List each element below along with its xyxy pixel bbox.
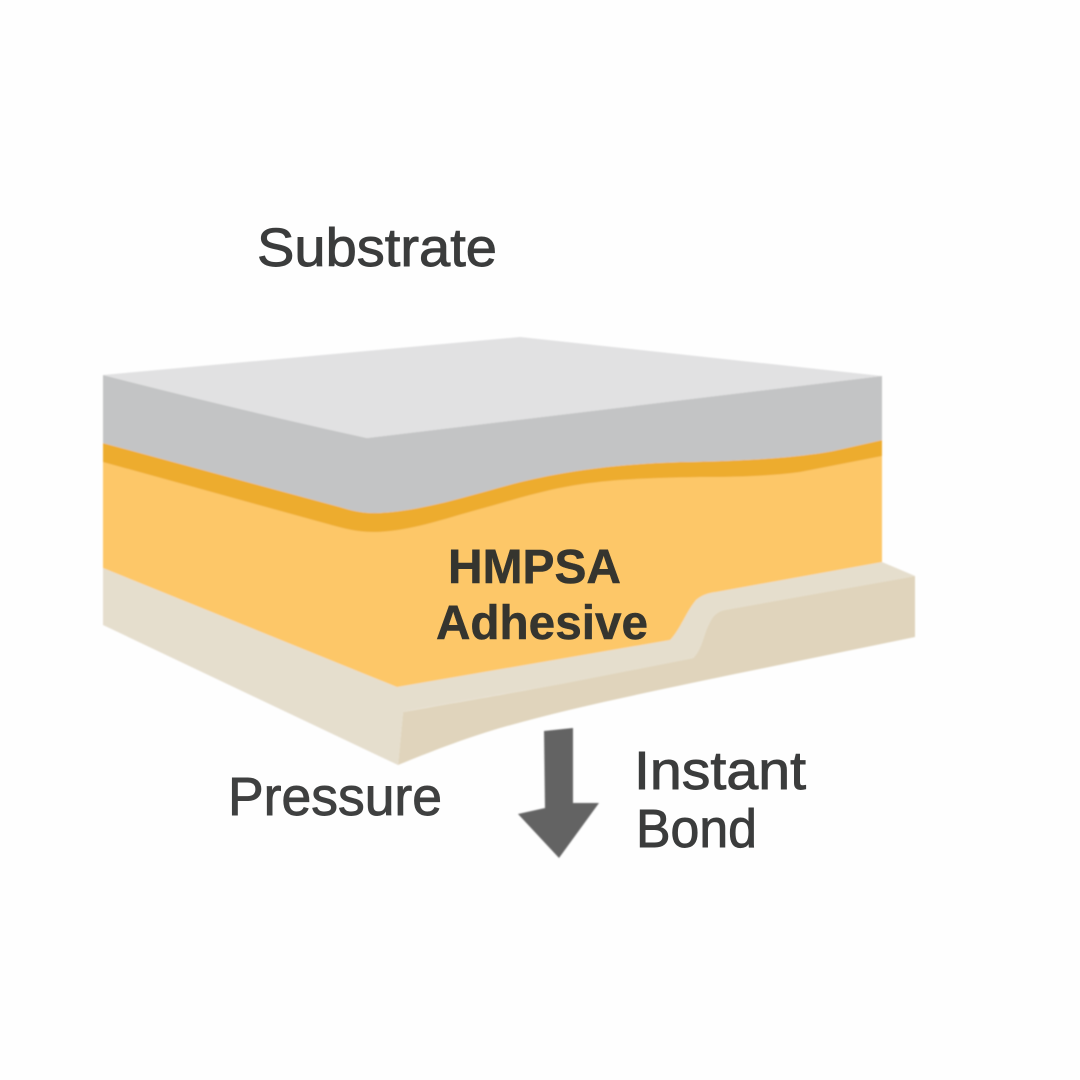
adhesive layer: yellow body [103, 445, 882, 687]
instant bond label [634, 741, 806, 859]
instant bond label: Bond [636, 799, 757, 859]
substrate: gray side faces [103, 375, 882, 513]
adhesive label [436, 541, 648, 650]
adhesive layer: darker orange band [103, 440, 882, 532]
arrow: downward pressure [518, 728, 599, 858]
adhesive label: HMPSA [448, 541, 621, 594]
adhesive label: Adhesive [436, 597, 648, 650]
layered material block [103, 337, 915, 765]
heading: substrate label: Substrate [257, 218, 497, 278]
pressure label: Pressure [228, 767, 442, 827]
substrate: light gray top face [103, 337, 882, 438]
instant bond label: Instant [634, 741, 806, 801]
bottom layer: beige top and left face [103, 562, 915, 765]
bottom layer: beige right front face [398, 576, 915, 765]
